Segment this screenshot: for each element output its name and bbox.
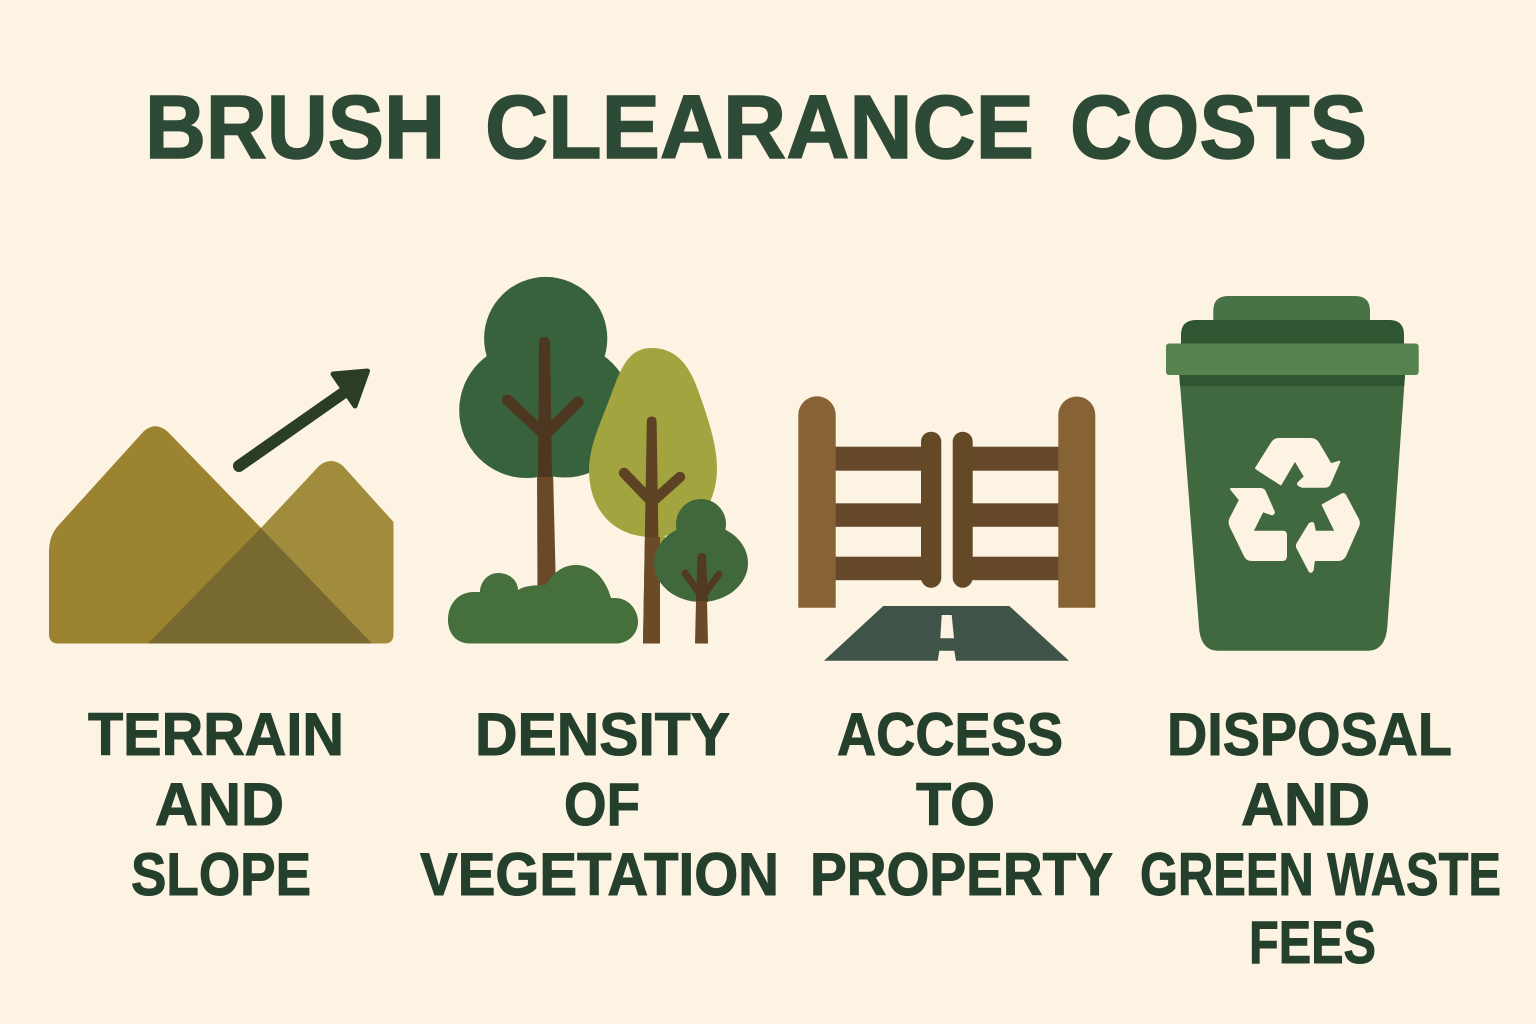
label: density of vegetation: DENSITY bbox=[475, 701, 730, 768]
bin body bbox=[1179, 375, 1405, 651]
label: density of vegetation: OF bbox=[564, 771, 640, 838]
label: terrain and slope: SLOPE bbox=[131, 841, 311, 908]
label: terrain and slope: TERRAIN bbox=[88, 701, 344, 768]
recycling symbol bbox=[1230, 439, 1359, 572]
road bbox=[824, 606, 1069, 661]
slope arrow bbox=[239, 371, 368, 466]
bush bbox=[448, 565, 638, 644]
gate posts bbox=[798, 396, 1095, 608]
overlap shadow bbox=[148, 528, 372, 644]
left mountain bbox=[49, 426, 372, 644]
label: terrain and slope bbox=[88, 701, 344, 908]
bin lid bbox=[1181, 320, 1404, 344]
large tree bbox=[459, 277, 632, 590]
gate stiles bbox=[921, 432, 973, 588]
label: access to property bbox=[810, 701, 1113, 908]
title: BRUSH bbox=[145, 78, 445, 178]
title: CLEARANCE bbox=[485, 78, 1034, 178]
label: disposal and green waste fees: FEES bbox=[1249, 909, 1376, 976]
icon: terrain and slope bbox=[49, 371, 394, 644]
medium pale tree bbox=[589, 348, 717, 644]
title: COSTS bbox=[1070, 78, 1367, 178]
label: density of vegetation bbox=[420, 701, 779, 908]
label: disposal and green waste fees: AND bbox=[1241, 771, 1370, 838]
label: access to property: ACCESS bbox=[837, 701, 1063, 768]
icon: green waste bin bbox=[1166, 296, 1419, 651]
small tree bbox=[654, 499, 748, 644]
icon: density of vegetation bbox=[448, 277, 748, 644]
label: disposal and green waste fees: DISPOSAL bbox=[1167, 701, 1452, 768]
gate rails bbox=[835, 447, 1059, 580]
bin rim bbox=[1166, 344, 1419, 375]
right mountain bbox=[261, 461, 394, 644]
label: disposal and green waste fees bbox=[1140, 701, 1501, 976]
title bbox=[145, 78, 1367, 178]
icon: access gate and road bbox=[798, 396, 1095, 661]
label: access to property: TO bbox=[916, 771, 995, 838]
label: access to property: PROPERTY bbox=[810, 841, 1113, 908]
bin top handle bbox=[1213, 296, 1370, 320]
label: density of vegetation: VEGETATION bbox=[420, 841, 779, 908]
label: terrain and slope: AND bbox=[155, 771, 284, 838]
